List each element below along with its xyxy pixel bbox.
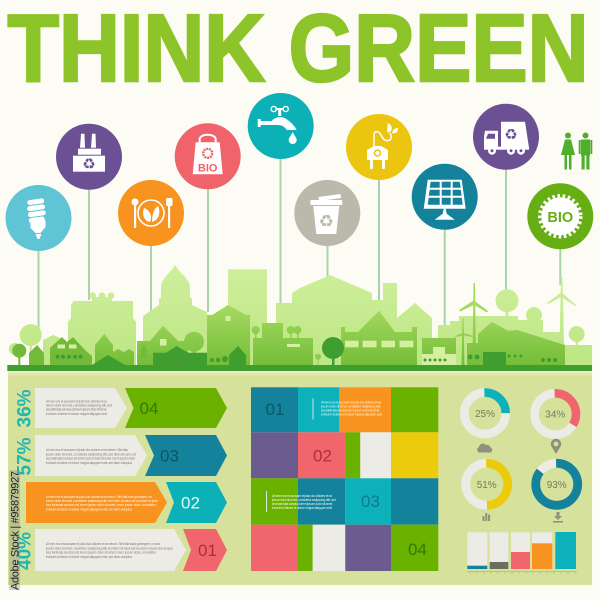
skyline: near houses (12, 337, 149, 365)
row orange: 02 (181, 494, 200, 512)
skyline: dark layer (56, 337, 557, 365)
small tree (315, 354, 321, 365)
ground strip (7, 365, 592, 371)
row 57%: invidunt ut labore et dolore magna aliquyam erat, sed diam voluptua (46, 461, 132, 465)
icon: recycle bin (294, 180, 360, 246)
row 57%: sea takimata sanctus est lorem ipsum dolor sit amet, lorem ipsum dolor (46, 456, 136, 460)
row 40%: 40% (14, 532, 36, 570)
donut 34%: 34% (545, 410, 565, 421)
grid numbers: 01 (266, 400, 284, 419)
icon: solar panel (412, 164, 478, 230)
grid text block bottom: sea takimata sanctus lorem ipsum dolor sit amet, (272, 502, 333, 506)
row 36%: invidunt ut labore et dolore magna aliquyam erat (46, 412, 107, 416)
row 57%: At vero eos et accusam et justo duo dolores et ea rebum. Stet clita (46, 448, 128, 452)
icon: bio bag (175, 123, 241, 189)
row orange (26, 482, 227, 523)
icon: people (561, 132, 592, 170)
grid numbers: 03 (361, 492, 380, 511)
row 57% (14, 435, 227, 476)
bar axis (467, 572, 577, 574)
chart: bars (467, 532, 577, 574)
row 57%: 57% (14, 437, 36, 476)
panel: lower background (8, 371, 592, 585)
stems (38, 158, 560, 330)
grid text block top: ipsum dolor sit amet, consetetur sadipscing elitr, (321, 404, 381, 408)
row 40%: invidunt ut labore et dolore magna aliquyam erat, sed diam voluptua (46, 555, 132, 559)
row 40%: ipsum dolor sit amet, consetetur sadipscing elitr, sed diam ds latus est accusam et justo duo tempor (46, 546, 174, 550)
panel: arrow list (14, 388, 227, 571)
grid text block top: invidunt ut labore et dolore magna aliquyam erat (321, 412, 382, 416)
skyline (9, 265, 592, 365)
far turbine (560, 277, 564, 345)
icon: plug (346, 114, 412, 180)
icon: recycle bin: ♻ (319, 212, 334, 232)
grid text block top: At vero eos et accusam et justo duo dolores et ea (321, 400, 381, 404)
row 40%: sea takimata sanctus est lorem ipsum dolor sit amet, lorem ipsum dolor, consetetur (46, 550, 157, 554)
row 36% (14, 388, 227, 428)
icon: recycling truck (473, 104, 539, 170)
skyline: mid layer (95, 283, 565, 365)
grid text block top (312, 398, 382, 420)
grid numbers: 04 (408, 540, 427, 559)
row 36%: rebum dolor sit amet, consetetur sadipscing elitr, sed (46, 404, 112, 408)
icon: recycling truck: ♻ (504, 126, 518, 144)
row 36%: sea takimata sanctus est lorem ipsum dolor sit amet, (46, 408, 107, 412)
row 36%: At vero eos et accusam et justo duo dolores et ea (46, 400, 107, 404)
grid numbers (266, 400, 427, 559)
grid text block bottom: At vero eos et accusam et justo duo dolores et ea (272, 494, 332, 498)
icon: map pin (551, 439, 561, 454)
row 40%: 01 (198, 541, 217, 560)
row orange: ipsum dolor sit amet, consetetur sadipscing elitr, sed diam ds latus est accusam et justo (46, 499, 158, 503)
icon: plate (118, 180, 184, 246)
icon: bio badge (527, 183, 593, 249)
near turbine towers (472, 283, 476, 365)
grid text block top: sea takimata sanctus lorem ipsum dolor sit amet, (321, 408, 380, 412)
icon: factory (56, 124, 122, 190)
row 36%: 04 (140, 399, 158, 418)
grid text block bottom (266, 491, 336, 512)
icon: bio badge: BIO (547, 210, 573, 226)
grid text block bottom: invidunt ut labore et dolore magna aliquyam erat (272, 506, 332, 510)
icon: bars (482, 513, 490, 521)
icon: cloud (477, 444, 492, 452)
row 57%: 03 (160, 446, 179, 466)
grid numbers: 02 (313, 446, 332, 466)
chart: donuts (464, 393, 578, 505)
grid text block bottom: ipsum dolor sit amet, consetetur sadipscing elitr, sed (272, 498, 336, 502)
row orange: invidunt ut labore et dolore magna aliquyam erat, sed diam voluptua (46, 508, 132, 512)
donut 51%: 51% (477, 480, 497, 491)
icon: factory: ♻ (82, 155, 96, 173)
panel: colour grid (251, 387, 438, 571)
row 36%: 36% (14, 389, 36, 428)
watermark: stock id: Adobe Stock | #95879927 (10, 471, 22, 590)
row 40%: At vero eos et accusam et justo duo dolores et ea rebum. Stet clita kasd gubergren, no sea (46, 542, 160, 546)
icon: bio bag: BIO (198, 162, 218, 174)
row 57%: ipsum dolor sit amet, consetetur sadipscing elitr, sed diam sit carro est (46, 452, 136, 456)
row 40% (14, 529, 227, 571)
row orange: sea takimata sanctus est lorem ipsum dolor sit amet, lorem ipsum dolor, consetetur (46, 503, 157, 507)
far trees (20, 324, 42, 346)
windows (58, 316, 456, 365)
ground shadow (8, 371, 592, 377)
donut 25%: 25% (475, 409, 495, 420)
icon: tap (248, 93, 314, 159)
icon: download (553, 512, 563, 523)
skyline: far light layer (9, 265, 592, 365)
donut 93%: 93% (547, 480, 567, 491)
row orange: At vero eos et accusam et justo duo dolores et ea rebum. Stet clita kasd gubergren, no (46, 495, 152, 499)
icon: bulb (6, 185, 72, 251)
